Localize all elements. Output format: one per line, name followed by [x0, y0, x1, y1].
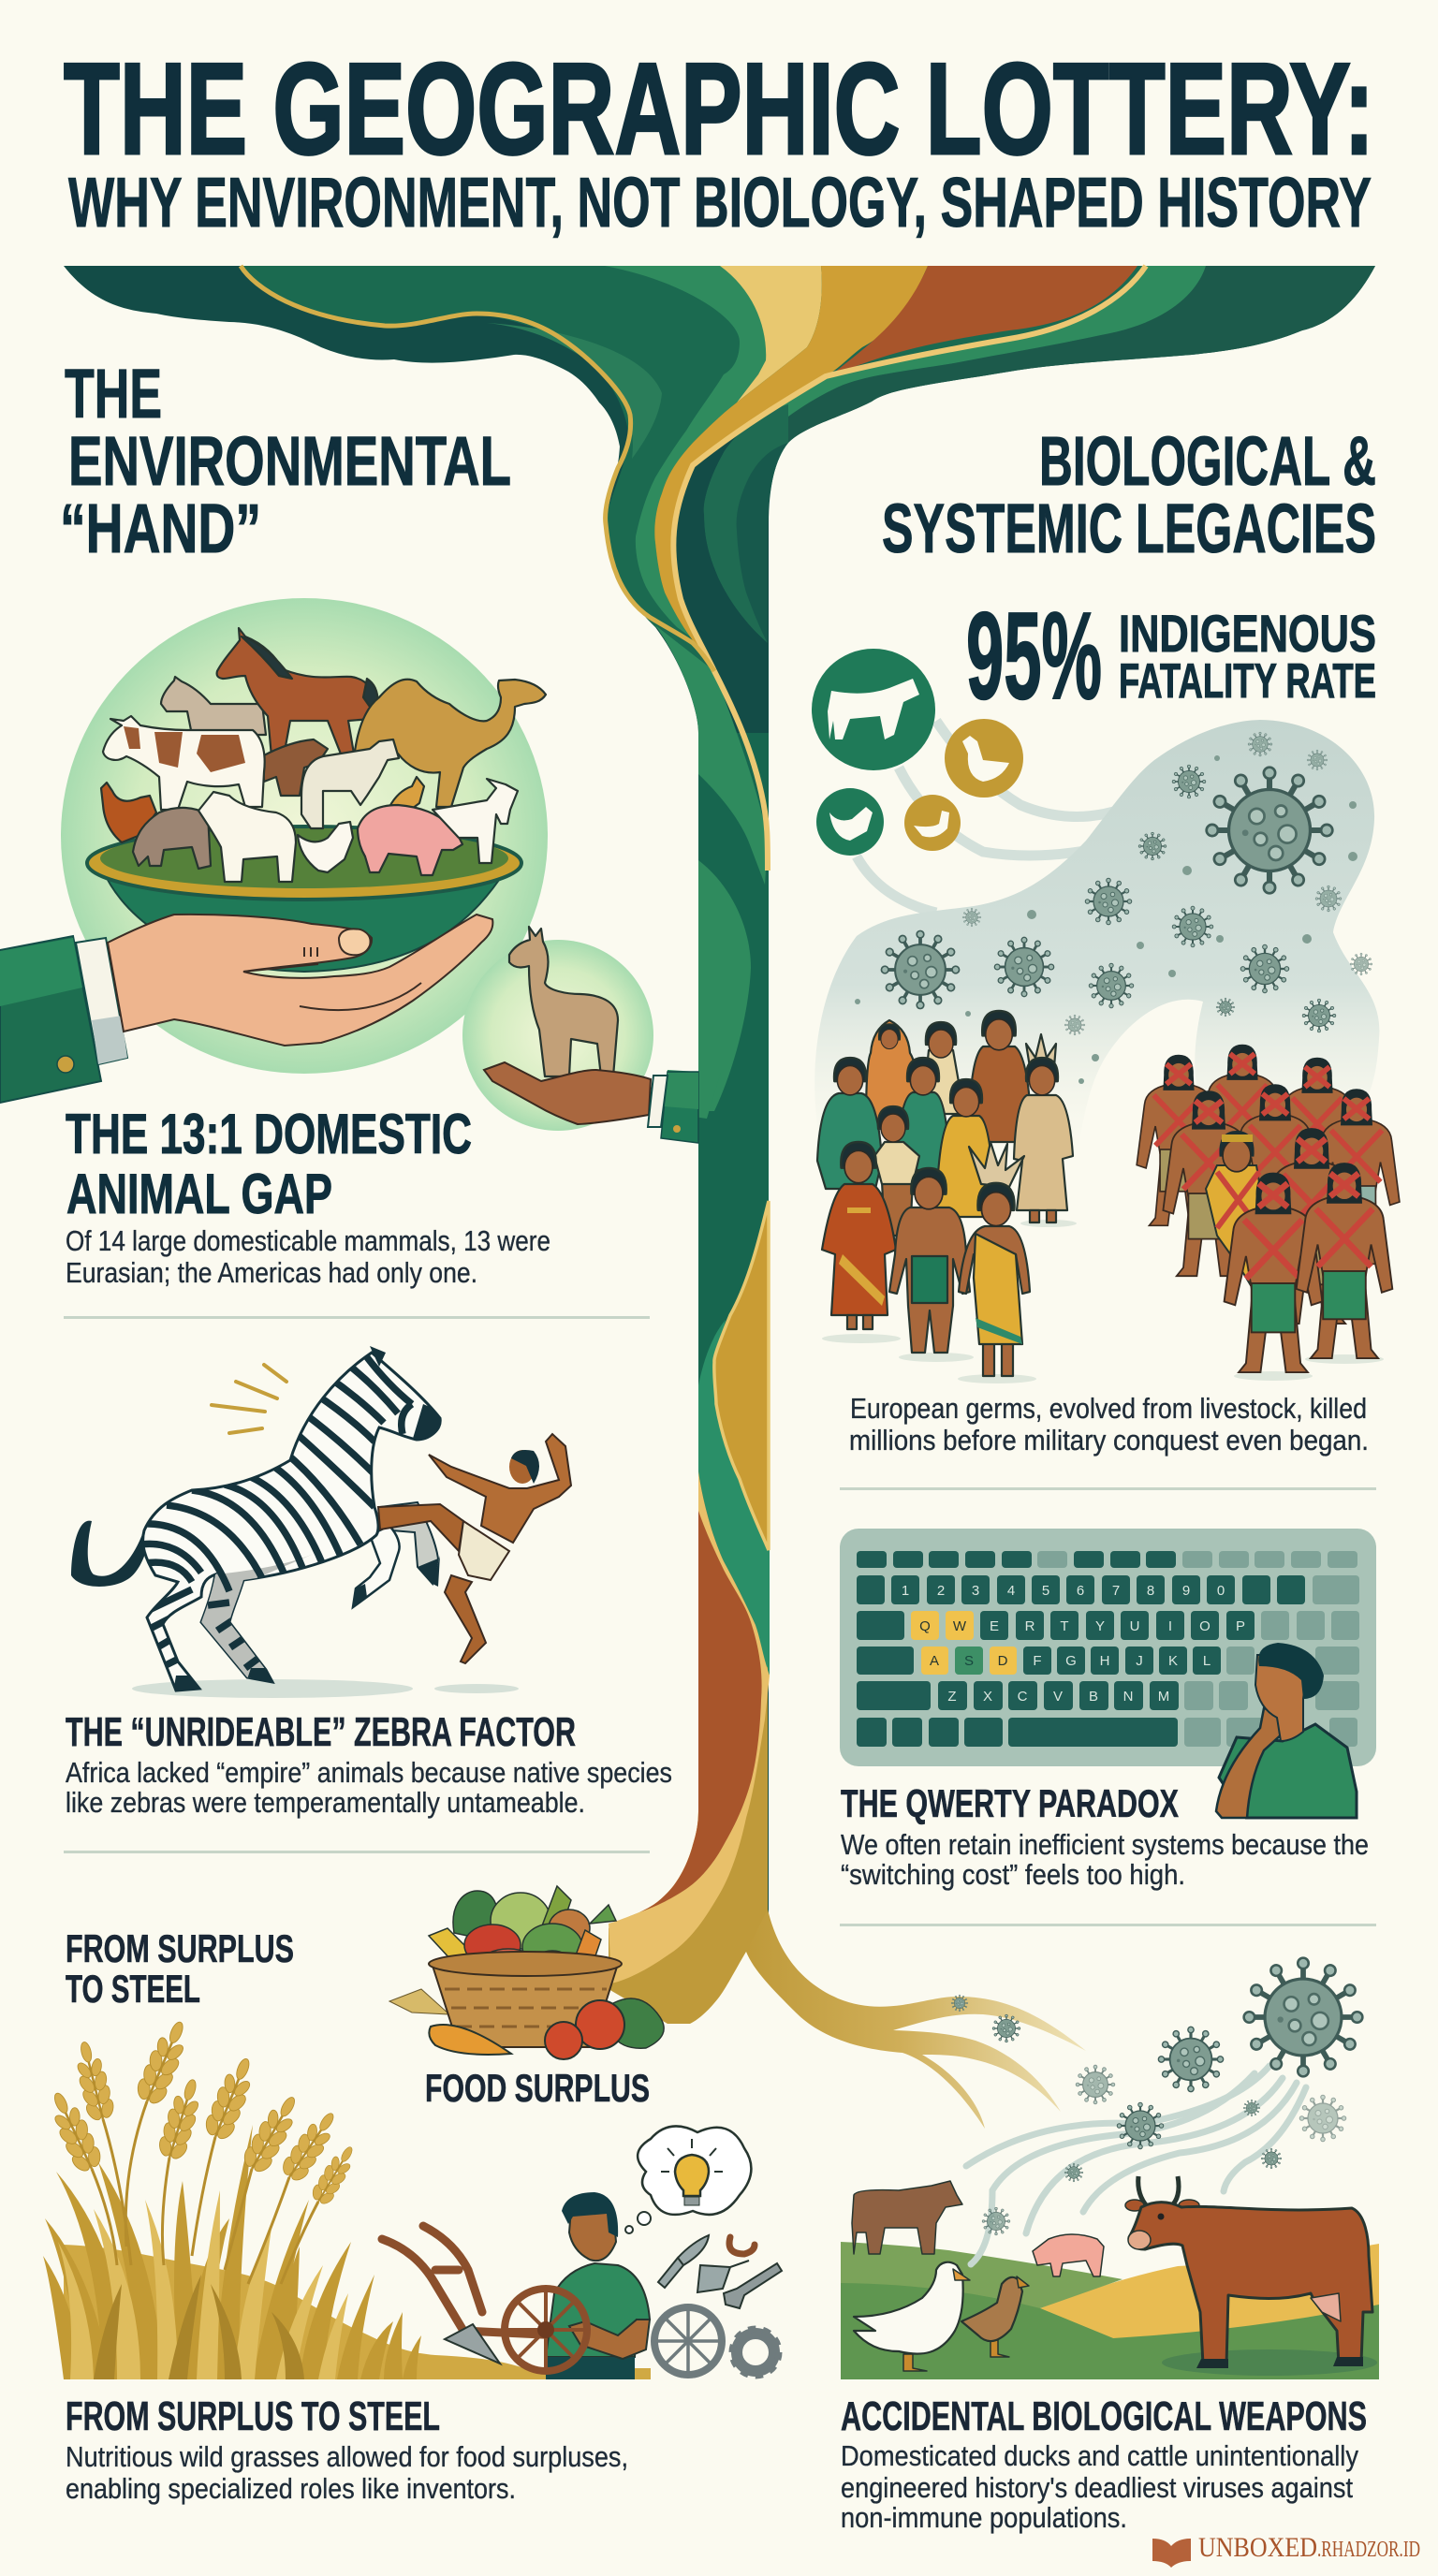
keys: P [1236, 1618, 1245, 1634]
bowl body [103, 871, 506, 972]
fatality statistic [966, 587, 1376, 724]
icon: knife [658, 2235, 709, 2288]
panel: qwerty keyboard [840, 1529, 1376, 1818]
man with green loincloth [889, 1168, 970, 1353]
food surplus label: FOOD SURPLUS [425, 2066, 650, 2110]
text block: accidental weapons: Domesticated ducks and cattle unintentionally [841, 2439, 1358, 2472]
trunk lower green [698, 733, 769, 1479]
mound [64, 2245, 651, 2379]
wheat stems [92, 2101, 318, 2284]
inventor shirt [546, 2263, 650, 2357]
right cuff [648, 1076, 668, 1127]
icon: trowel [697, 2261, 749, 2292]
text block: qwerty paradox: We often retain inefficient systems because the [841, 1828, 1369, 1861]
logo: unboxed [1152, 2532, 1420, 2568]
boy [874, 1106, 919, 1236]
text block: zebra factor: like zebras were temperamentally untameable. [66, 1786, 585, 1819]
bright green band [605, 266, 766, 637]
lighter green shade [487, 323, 662, 459]
inventor head [562, 2192, 618, 2261]
keys: M [1158, 1689, 1169, 1705]
keys: X [983, 1689, 992, 1705]
animals [101, 628, 546, 882]
zebra [71, 1346, 445, 1692]
top right outer band [788, 266, 1375, 443]
panel: inventor with plow [382, 2126, 782, 2379]
keys: R [1025, 1618, 1035, 1634]
light gold sweep [609, 1471, 770, 1983]
keys: G [1065, 1653, 1077, 1669]
text block: surplus to steel: FROM SURPLUS TO STEEL [66, 2393, 440, 2439]
icon: light bulb [661, 2139, 723, 2205]
keys [857, 1551, 1359, 1747]
icon: chicken circle [816, 788, 884, 856]
woman in green robe [897, 1058, 949, 1170]
vegetables [429, 1886, 616, 1979]
subheading: from surplus to steel: FROM SURPLUS [66, 1926, 294, 1970]
person in brown cloak [969, 1011, 1032, 1142]
icon: spoked metal wheel [654, 2307, 722, 2375]
bowl grass [100, 828, 508, 888]
keys: B [1089, 1689, 1098, 1705]
left sleeve [0, 936, 101, 1103]
viruses [951, 1958, 1362, 2235]
tree base [64, 266, 1375, 1928]
light green swirl [698, 860, 751, 1111]
brown duck [961, 2276, 1029, 2357]
white chicken [298, 822, 353, 872]
germs caption [849, 1392, 1369, 1456]
air wisps [966, 2066, 1306, 2264]
left section heading: “HAND” [60, 490, 261, 567]
panel: zebra illustration [71, 1346, 571, 1698]
fatality statistic: 95% [966, 587, 1102, 724]
elder in orange robe [866, 1020, 919, 1123]
right bright green band [740, 266, 1206, 431]
text block: qwerty paradox [841, 1781, 1369, 1891]
pig [1033, 2234, 1104, 2276]
keys: 1 [902, 1583, 909, 1599]
thinking man [1216, 1643, 1357, 1818]
grey boar [133, 808, 211, 869]
keys: V [1053, 1689, 1063, 1705]
text block: qwerty paradox: THE QWERTY PARADOX [841, 1781, 1179, 1825]
text block: 13 to 1 gap [66, 1103, 550, 1289]
icon: wrench [724, 2263, 782, 2308]
text block: 13 to 1 gap: Of 14 large domesticable mammals, 13 were [66, 1224, 550, 1257]
large hand [108, 915, 492, 1046]
man in green robe [817, 1058, 882, 1189]
icon: small duck circle [904, 795, 961, 851]
grass blades [43, 2125, 421, 2379]
darkest trunk inner [673, 452, 768, 824]
text block: qwerty paradox: “switching cost” feels too high. [841, 1858, 1185, 1891]
leaves right [613, 1998, 664, 2048]
keys: 7 [1112, 1583, 1120, 1599]
llama [509, 927, 618, 1076]
central tree divider [64, 266, 1375, 2129]
icon: duck circle [945, 719, 1023, 798]
keys: N [1123, 1689, 1133, 1705]
keys: U [1130, 1618, 1139, 1634]
rust trunk band [639, 1511, 762, 1912]
keys: O [1199, 1618, 1211, 1634]
subheading: from surplus to steel: TO STEEL [66, 1967, 200, 2011]
keys: C [1018, 1689, 1028, 1705]
keys: 4 [1007, 1583, 1015, 1599]
person in yellow robe [936, 1079, 994, 1217]
trunk inner dark [737, 443, 788, 643]
keys: K [1168, 1653, 1178, 1669]
kicking leg [378, 1504, 463, 1551]
grey sheep [301, 739, 399, 828]
keys: L [1203, 1653, 1211, 1669]
carrot [429, 2025, 511, 2055]
icon: food basket [389, 1886, 664, 2059]
thought bubble [625, 2126, 751, 2233]
camel [354, 680, 546, 807]
icon: open book [1152, 2539, 1191, 2568]
panel: wheat field [41, 2015, 651, 2379]
text block: 13 to 1 gap: ANIMAL GAP [66, 1163, 332, 1225]
left gold line [241, 266, 714, 671]
wheat ears [41, 2015, 362, 2209]
bright band in lower trunk [698, 1320, 770, 1676]
white sheep [198, 792, 296, 882]
text block: zebra factor: Africa lacked “empire” animals because native species [66, 1756, 672, 1789]
right section heading [882, 422, 1376, 567]
text block: 13 to 1 gap: Eurasian; the Americas had only one. [66, 1256, 477, 1289]
rust band [829, 266, 1137, 377]
text block: accidental weapons [841, 2393, 1367, 2534]
upper gold crescent [714, 1201, 769, 1550]
basket rim [429, 1952, 622, 1976]
trunk mid green [704, 404, 788, 643]
torso and arms [429, 1434, 571, 1543]
panel: healthy indigenous people [817, 1011, 1077, 1383]
plow handles [382, 2226, 562, 2335]
panel: domestic animal gap illustration [0, 598, 698, 1143]
tomatoes [576, 2000, 624, 2049]
plow blade [445, 2324, 500, 2364]
kicking man [378, 1434, 571, 1663]
keys: 2 [937, 1583, 945, 1599]
basket body [433, 1964, 618, 2047]
icon: hook tool [729, 2237, 755, 2254]
loincloth [459, 1521, 509, 1580]
text block: 13 to 1 gap: THE 13:1 DOMESTIC [66, 1103, 472, 1165]
icon: cow circle [812, 649, 935, 770]
keys: 6 [1077, 1583, 1084, 1599]
small hand [484, 1062, 651, 1124]
spotted cow [103, 716, 265, 810]
ground shadow [822, 1220, 1077, 1383]
left section heading: ENVIRONMENTAL [68, 422, 511, 500]
raised front leg [353, 1526, 400, 1607]
gold band [654, 266, 928, 671]
keys: 0 [1217, 1583, 1225, 1599]
small brown cow [852, 2181, 962, 2254]
title [64, 37, 1374, 242]
body [143, 1353, 440, 1690]
text block: accidental weapons: engineered history's deadliest viruses against [841, 2471, 1353, 2504]
text block: accidental weapons: non-immune populations. [841, 2501, 1127, 2534]
text block: surplus to steel: Nutritious wild grasses allowed for food surpluses, [66, 2440, 628, 2473]
light gold band [720, 266, 822, 402]
woman in rust dress [822, 1142, 896, 1329]
woman in yellow with red x [1206, 1131, 1271, 1310]
keys: W [953, 1618, 967, 1634]
ground shadow [1234, 1354, 1384, 1381]
panel: stricken indigenous people [1137, 1045, 1400, 1381]
left section heading [60, 355, 511, 567]
wooden wheel [505, 2289, 587, 2371]
keys: 9 [1182, 1583, 1190, 1599]
standing leg [445, 1575, 486, 1663]
panel: accidental biological weapons illustration [841, 1958, 1379, 2379]
germs caption: European germs, evolved from livestock, killed [850, 1392, 1367, 1425]
keys: Q [919, 1618, 931, 1634]
inventor arm [569, 2320, 650, 2359]
inventor trousers [546, 2357, 635, 2379]
person in cream top [922, 1022, 964, 1114]
connectors [857, 721, 1133, 913]
keys: T [1060, 1618, 1069, 1634]
germ cloud [814, 720, 1379, 1161]
keys: 8 [1147, 1583, 1154, 1599]
large brown cow [1125, 2176, 1372, 2368]
pig [358, 805, 462, 875]
left cuff [76, 938, 127, 1064]
keys: D [998, 1653, 1008, 1669]
small green circle [462, 940, 653, 1131]
keyboard body [840, 1529, 1376, 1766]
lower gold trunk and left root [609, 1666, 777, 2024]
keys: Z [947, 1689, 957, 1705]
keys: H [1100, 1653, 1109, 1669]
keys: J [1136, 1653, 1143, 1669]
stripes [140, 1357, 445, 1692]
icon: gear [732, 2329, 779, 2376]
sleeve merging into trunk [661, 1070, 721, 1119]
subheading: from surplus to steel [66, 1926, 294, 2011]
right sleeve [661, 1072, 698, 1143]
right gold stripe [673, 266, 1146, 871]
keys: 5 [1042, 1583, 1049, 1599]
large cow shadow [1162, 2349, 1377, 2376]
ground shadows [132, 1679, 519, 1698]
woman with feather headdress [1014, 1034, 1073, 1222]
red chicken [101, 783, 156, 842]
calf [262, 739, 328, 796]
panel: germ spread illustration [812, 649, 1379, 1161]
keys: Y [1095, 1618, 1105, 1634]
text block: zebra factor: THE “UNRIDEABLE” ZEBRA FACTOR [66, 1709, 576, 1755]
head [509, 1450, 539, 1484]
text block: surplus to steel [66, 2393, 628, 2505]
donkey [161, 677, 266, 735]
bright neck band [655, 625, 768, 885]
impact sparks [212, 1365, 286, 1433]
large green circle [61, 598, 548, 1074]
ground scene [841, 2242, 1379, 2379]
keys: 3 [972, 1583, 979, 1599]
tail [71, 1521, 150, 1587]
green core [241, 266, 1146, 671]
keys: I [1168, 1618, 1172, 1634]
right root branches [746, 1910, 1086, 2129]
white goat [433, 779, 518, 863]
horse [217, 628, 378, 756]
keys: S [964, 1653, 974, 1669]
front woman with feathers [959, 1142, 1030, 1376]
white duck [854, 2262, 970, 2371]
keys: A [930, 1653, 939, 1669]
keys: E [990, 1618, 999, 1634]
bowl rim [87, 827, 521, 900]
text block: surplus to steel: enabling specialized roles like inventors. [66, 2472, 516, 2505]
text block: zebra factor [66, 1709, 672, 1819]
wheat sprig [389, 1989, 449, 2014]
viruses [881, 732, 1372, 1035]
germs caption: millions before military conquest even began. [849, 1424, 1369, 1456]
logo: unboxed: UNBOXED [1198, 2532, 1317, 2563]
small bird [389, 777, 424, 809]
kicked front leg [380, 1502, 438, 1584]
keys: F [1033, 1653, 1042, 1669]
left section heading: THE [65, 355, 162, 432]
